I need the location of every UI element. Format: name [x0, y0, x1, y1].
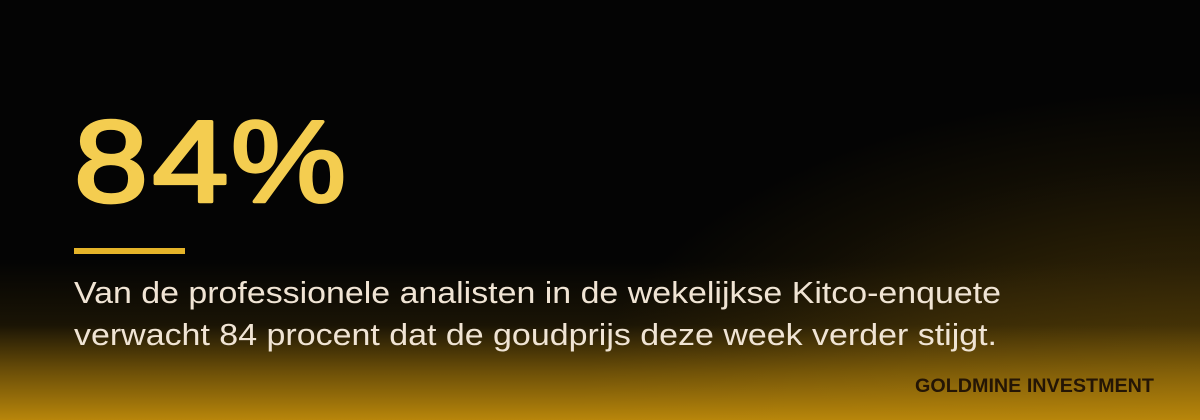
big statistic: 84%: % — [231, 96, 346, 226]
description text — [74, 275, 1001, 352]
description text: verwacht 84 procent dat de goudprijs deze week verder stijgt. — [74, 317, 997, 352]
description text: Van de professionele analisten in de wekelijkse Kitco-enquete — [74, 275, 1001, 310]
big statistic: 84%: 8 — [74, 96, 148, 226]
accent rule — [74, 248, 185, 254]
brand label: GOLDMINE INVESTMENT — [915, 376, 1154, 397]
big statistic: 84%: 4 — [152, 96, 228, 226]
big statistic: 84% — [74, 96, 346, 226]
